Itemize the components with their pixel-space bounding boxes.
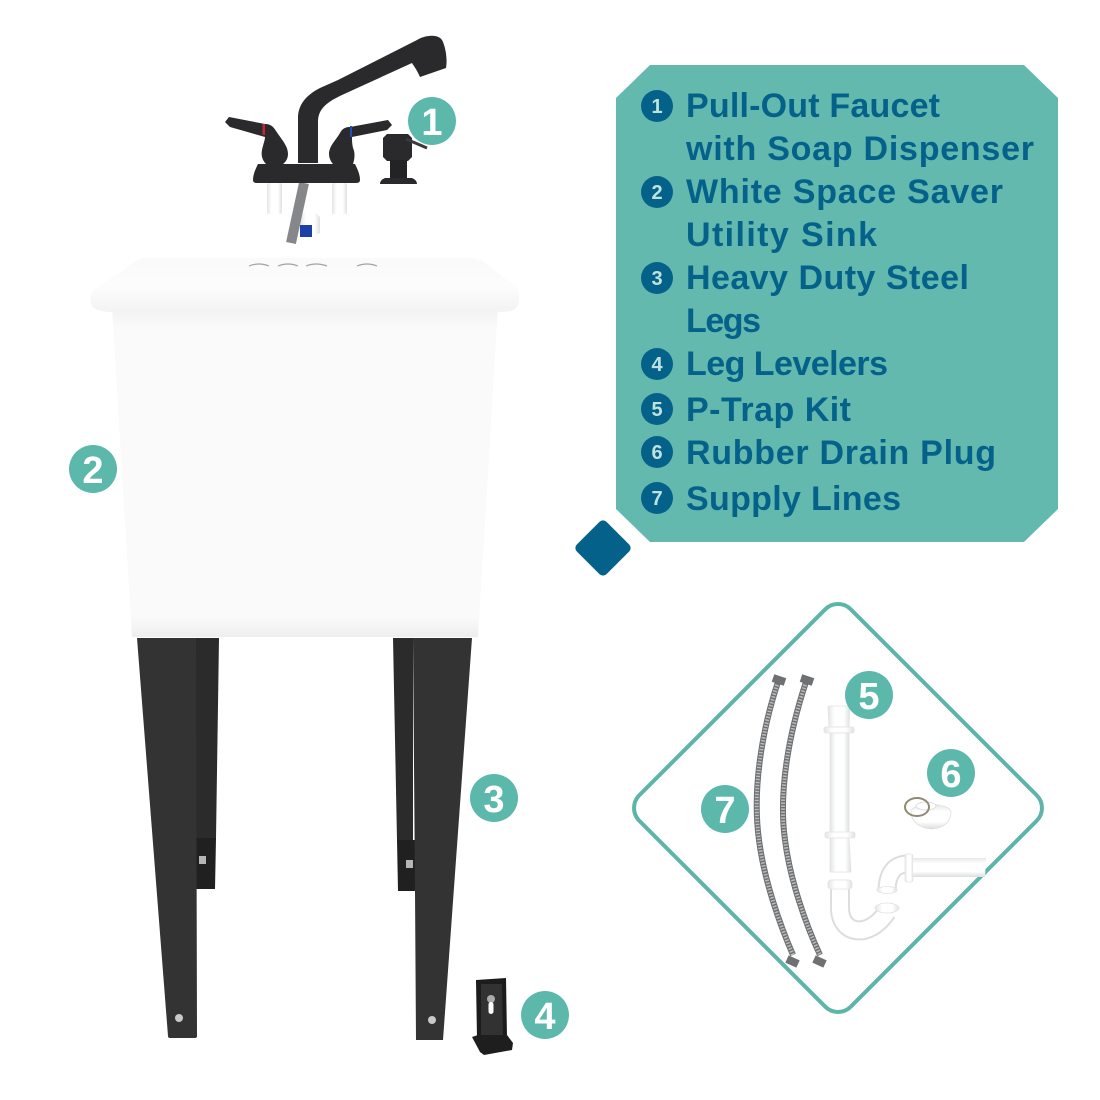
list item 5: 5 <box>651 399 663 421</box>
list item 5: P-Trap Kit <box>686 391 851 429</box>
number marker 5: 5 <box>858 676 880 718</box>
number marker 6: 6 <box>940 754 962 796</box>
number marker 1 <box>408 97 456 145</box>
right leg <box>393 638 472 1040</box>
list item 1: 1 <box>651 96 663 118</box>
number marker 4: 4 <box>534 996 556 1038</box>
list item 3 <box>641 259 969 340</box>
list item 7: Supply Lines <box>686 480 901 518</box>
number marker 3 <box>470 774 518 822</box>
p-trap kit <box>824 706 986 930</box>
list item 2: Utility Sink <box>686 216 877 254</box>
list item 2: 2 <box>651 182 663 204</box>
list item 4: Leg Levelers <box>686 345 888 383</box>
right handle <box>329 120 392 164</box>
number marker 4 <box>521 991 569 1039</box>
number marker 5 <box>845 671 893 719</box>
list item 1: with Soap Dispenser <box>685 130 1034 168</box>
list item 2: White Space Saver <box>686 173 1003 211</box>
left handle <box>225 117 288 164</box>
sink tub <box>91 258 519 637</box>
number marker 2: 2 <box>82 450 104 492</box>
list item 3: Legs <box>686 302 761 340</box>
list item 4: 4 <box>651 354 663 376</box>
list item 7: 7 <box>651 488 663 510</box>
number marker 7: 7 <box>714 790 736 832</box>
list item 1 <box>641 87 1034 168</box>
decorative diamond <box>573 518 633 578</box>
left leg <box>137 638 219 1038</box>
supply lines <box>757 678 825 964</box>
number marker 3: 3 <box>483 779 505 821</box>
list item 3: Heavy Duty Steel <box>686 259 969 297</box>
callout panel: parts list <box>616 65 1058 542</box>
panel: included accessories diamond <box>627 597 1049 1019</box>
number marker 6 <box>927 749 975 797</box>
list item 6: 6 <box>651 442 663 464</box>
list item 2 <box>641 173 1003 254</box>
list item 6: Rubber Drain Plug <box>686 434 996 472</box>
list item 3: 3 <box>651 268 663 290</box>
number marker 7 <box>701 785 749 833</box>
number marker 1: 1 <box>421 102 443 144</box>
faucet <box>225 36 447 243</box>
number marker 2 <box>69 445 117 493</box>
spout <box>298 36 447 163</box>
white tubes <box>267 183 347 243</box>
drain plug <box>905 798 951 829</box>
list item 1: Pull-Out Faucet <box>686 87 940 125</box>
base plate <box>253 164 360 183</box>
leg leveler <box>472 978 513 1055</box>
soap dispenser <box>380 134 427 184</box>
